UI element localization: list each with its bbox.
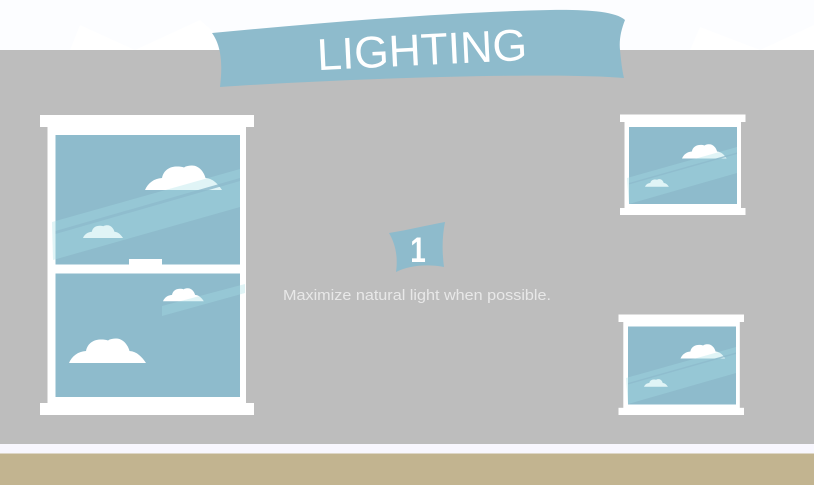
clouds [644, 344, 725, 387]
lower glare [162, 284, 245, 316]
frame [624, 118, 741, 212]
small window bottom [618, 314, 744, 415]
clouds [69, 166, 222, 363]
sash handle [129, 259, 162, 265]
glare line [628, 352, 736, 384]
top cap [40, 115, 254, 127]
clouds [645, 144, 727, 187]
title text: LIGHTING [316, 21, 528, 80]
sill [620, 208, 746, 215]
pane [629, 127, 737, 204]
glare line [56, 178, 240, 234]
upper glare [52, 169, 240, 260]
glare [626, 347, 736, 404]
number: 1 [410, 230, 426, 270]
caption: Maximize natural light when possible. [283, 287, 551, 304]
small window top [620, 114, 746, 215]
window frame [48, 120, 246, 410]
frame [623, 318, 740, 412]
window sill trim [0, 444, 814, 454]
lower pane [56, 274, 240, 397]
large double-hung window [40, 115, 254, 415]
number badge [389, 222, 445, 272]
floor [0, 454, 814, 485]
glare line [629, 152, 737, 184]
sill [618, 408, 744, 415]
cap [620, 114, 746, 122]
pane [628, 326, 736, 404]
upper pane [56, 135, 240, 264]
cap [618, 314, 744, 322]
title banner [212, 10, 625, 87]
glare [627, 147, 737, 204]
bottom sill [40, 403, 254, 415]
